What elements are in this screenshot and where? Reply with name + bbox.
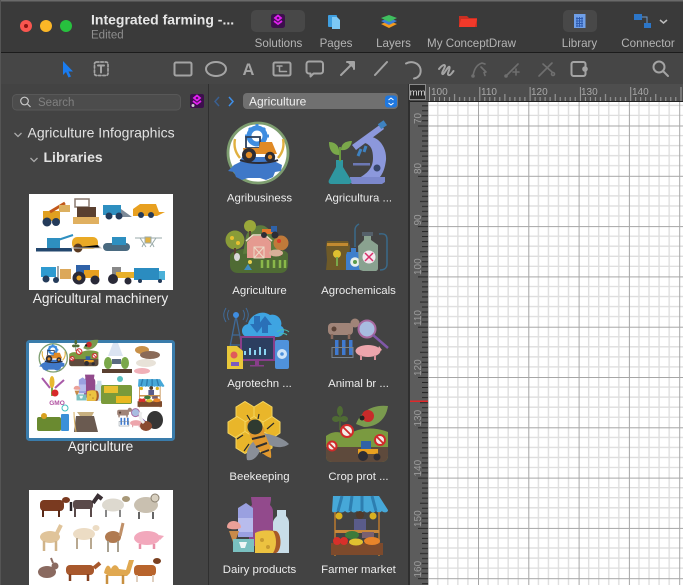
icon: arc tool	[406, 62, 421, 78]
toolbar button: Pages: Pages	[320, 37, 353, 50]
toolbar button: Pages	[320, 15, 353, 50]
left ruler: 100	[413, 258, 424, 275]
library dropdown: Agriculture	[249, 94, 307, 108]
ruler position marker	[410, 400, 428, 402]
combine harvester	[133, 204, 165, 218]
plant	[339, 406, 341, 430]
toolbar button: My ConceptDraw: My ConceptDraw	[427, 37, 517, 50]
library icon: Farmer market	[331, 496, 388, 556]
mini icon grid: GMO	[49, 400, 65, 407]
library icon: Agrotechnology	[224, 308, 289, 369]
rabbit	[38, 558, 58, 578]
alpaca	[40, 525, 61, 551]
pink pig	[134, 531, 164, 549]
seedling	[329, 141, 352, 161]
produce	[333, 537, 341, 545]
barn	[246, 235, 272, 258]
leaf with ladybug	[356, 406, 388, 427]
dark horse	[71, 496, 102, 517]
icon: disabled point tool	[472, 63, 486, 77]
blue loader	[103, 205, 132, 220]
document	[227, 346, 243, 369]
icon: text tool: A	[242, 61, 254, 79]
left ruler: 80	[413, 162, 424, 174]
hanging produce	[336, 512, 342, 520]
flask	[329, 160, 351, 184]
icon: solutions filter	[190, 94, 204, 108]
library icon: Crop protection	[326, 406, 388, 462]
library label: Beekeeping: Beekeeping	[229, 471, 290, 483]
library thumbnail: Agricultural machinery	[29, 194, 173, 290]
toolbar button: Library	[562, 10, 597, 50]
trees	[226, 220, 288, 257]
forklift	[41, 266, 71, 283]
left ruler: 110	[413, 310, 424, 326]
library icon: Beekeeping	[228, 402, 289, 460]
library label: Agricultura ...: Agricultura ...	[325, 192, 392, 204]
label: Agriculture: Agriculture	[68, 439, 133, 454]
icon: search tool	[654, 62, 668, 76]
tree: Agriculture Infographics: Agriculture Infographics	[28, 124, 175, 140]
divider bars	[0, 0, 410, 585]
mini icon grid	[37, 340, 164, 432]
library thumbnail: Agriculture (selected)	[28, 340, 174, 440]
phone	[275, 340, 289, 369]
tractor	[240, 137, 278, 163]
panel: canvas grid	[428, 102, 683, 585]
orange tractor	[72, 265, 100, 284]
shelf and stall	[335, 530, 379, 533]
icon: note tool	[572, 62, 587, 76]
awning	[332, 496, 388, 512]
library label: Agrotechn ...: Agrotechn ...	[227, 378, 292, 390]
library icon: Agrochemicals	[326, 224, 387, 271]
left ruler: 140	[413, 459, 424, 476]
top ruler	[410, 84, 683, 102]
library dropdown	[243, 93, 398, 109]
pig	[356, 345, 382, 360]
icon: text box tool	[274, 62, 290, 76]
top ruler: 120	[531, 87, 548, 98]
green bottle	[358, 236, 378, 271]
ruler unit box: mm	[410, 88, 425, 98]
library navigation arrows	[215, 97, 233, 106]
cell tower	[229, 316, 243, 352]
left ruler	[410, 102, 428, 585]
left ruler: 70	[413, 112, 424, 124]
tanker	[71, 237, 101, 252]
library icon: Dairy products	[227, 497, 289, 553]
left ruler: 90	[413, 214, 424, 226]
icon: text select tool	[94, 62, 108, 76]
icon: line tool	[375, 62, 387, 75]
search field: Search	[38, 97, 74, 109]
camel	[104, 560, 134, 584]
white sheep	[102, 496, 130, 517]
toolbar button: Connector	[621, 14, 675, 50]
top ruler: 100	[431, 87, 448, 98]
top ruler: 110	[481, 87, 497, 98]
blue jug	[346, 248, 363, 270]
microscope	[350, 120, 387, 184]
panel: title bar	[0, 0, 683, 53]
top ruler: 130	[581, 87, 598, 98]
field harvester	[36, 235, 73, 252]
tractor	[358, 441, 380, 461]
yellow tractor	[108, 267, 135, 284]
no signs	[328, 425, 385, 450]
frame	[335, 512, 379, 556]
library label: Crop prot ...: Crop prot ...	[328, 471, 389, 483]
monitor	[240, 336, 275, 361]
library label: Agrochemicals: Agrochemicals	[321, 285, 396, 297]
document title: Integrated farming -...	[91, 12, 234, 28]
wings	[262, 433, 289, 447]
ox	[66, 563, 100, 581]
icon: disabled add point tool	[505, 64, 519, 77]
library label: Farmer market: Farmer market	[321, 564, 397, 576]
body	[247, 420, 271, 458]
field	[326, 429, 388, 462]
icon: disabled cut tool	[539, 63, 554, 76]
milk can	[249, 497, 273, 546]
toolbar button: Layers: Layers	[376, 37, 411, 50]
icon: ellipse tool	[206, 62, 226, 76]
search field	[12, 94, 180, 110]
test tubes	[332, 340, 353, 358]
library icon: Agricultural science	[329, 120, 387, 184]
ram	[134, 494, 159, 519]
icon: speech bubble tool	[306, 62, 323, 76]
library label: Dairy products: Dairy products	[223, 564, 297, 576]
vendor	[356, 511, 364, 519]
roller	[73, 199, 99, 224]
left ruler: 160	[413, 560, 424, 578]
top ruler: 140	[632, 87, 649, 98]
library icon: Agriculture farm	[226, 220, 288, 273]
left ruler: 120	[413, 359, 424, 376]
library label: Agriculture: Agriculture	[232, 285, 287, 297]
panel: drawing tools bar	[0, 53, 683, 84]
library label: Animal br ...: Animal br ...	[328, 378, 389, 390]
goat	[73, 525, 100, 549]
icon: freehand tool	[439, 65, 454, 75]
blue truck	[134, 268, 165, 283]
tree: Libraries: Libraries	[44, 149, 103, 165]
cow	[328, 318, 360, 339]
brown cow	[40, 497, 70, 517]
toolbar button: My ConceptDraw	[427, 16, 517, 50]
toolbar button: Layers	[376, 15, 411, 50]
top gear	[245, 124, 269, 144]
small tractor	[261, 226, 278, 238]
llama	[105, 523, 123, 552]
document title: Edited	[91, 30, 124, 42]
icon: rectangle tool	[174, 62, 192, 76]
library icon: Animal breeding	[328, 318, 388, 360]
sprayer wand and hose	[355, 224, 387, 270]
crops and animals	[234, 250, 285, 270]
drone	[135, 237, 162, 247]
library icon: Agribusiness	[228, 123, 288, 183]
telehandler	[42, 203, 70, 226]
cloud	[242, 313, 284, 337]
library label: Agribusiness: Agribusiness	[227, 192, 292, 204]
bottom gear	[228, 157, 282, 180]
icon: pointer tool	[63, 61, 73, 78]
library thumbnail: Farm animals	[29, 490, 173, 585]
left ruler: 150	[413, 510, 424, 527]
toolbar button: Library: Library	[562, 37, 597, 50]
left ruler: 130	[413, 409, 424, 426]
cheese	[255, 530, 280, 553]
document title	[91, 12, 234, 42]
icon: arrow tool	[341, 62, 354, 75]
toolbar button: Solutions	[251, 10, 305, 50]
window traffic lights	[20, 20, 72, 32]
magnifying glass	[358, 320, 388, 348]
wheat	[235, 139, 283, 158]
milk carton	[238, 503, 253, 537]
honeycomb	[228, 402, 280, 454]
toolbar button: Connector: Connector	[621, 37, 675, 50]
toolbar button: Solutions: Solutions	[255, 37, 303, 50]
crawler tractor	[103, 237, 130, 251]
seed bag	[326, 241, 350, 270]
label: Agricultural machinery: Agricultural machinery	[33, 291, 168, 306]
ice cream	[227, 521, 241, 529]
bull	[134, 558, 161, 582]
glass bottle	[273, 510, 289, 553]
butter box	[233, 539, 254, 552]
